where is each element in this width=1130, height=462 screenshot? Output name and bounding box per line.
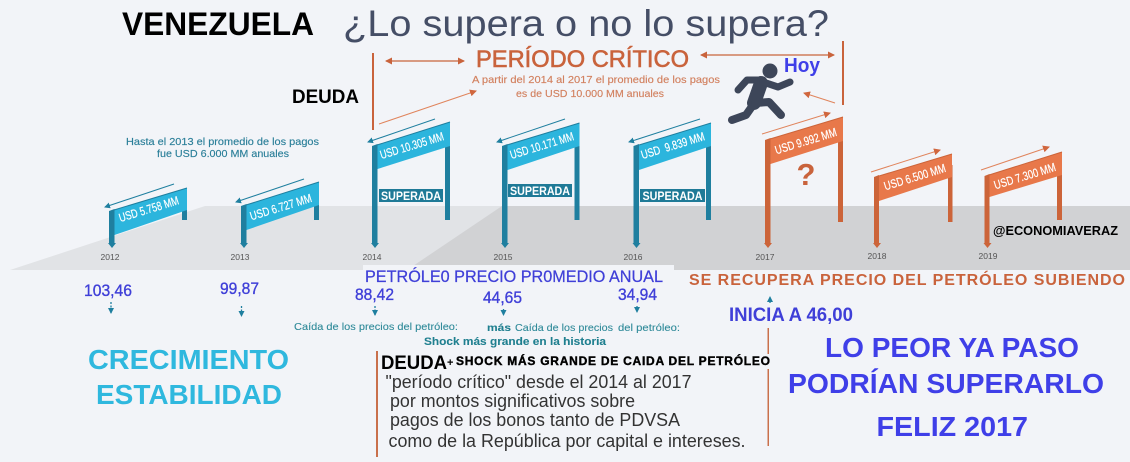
heading: oil price recovers: SE RECUPERA PRECIO DEL PETRÓLEO SUBIENDO <box>689 270 1125 289</box>
heading: conclusion: PODRÍAN SUPERARLO <box>788 368 1104 399</box>
credit handle: @ECONOMIAVERAZ <box>993 223 1118 238</box>
text: critical period description: pagos de los bonos tanto de PDVSA <box>390 410 680 430</box>
hurdle 2018 <box>871 150 952 248</box>
year axis labels: 2018 <box>868 251 887 261</box>
title: question: ¿Lo supera o no lo supera? <box>343 3 829 44</box>
text: fall of oil prices: más <box>487 322 511 334</box>
text: fall of oil prices <box>294 321 680 348</box>
year axis labels: 2015 <box>494 252 513 262</box>
hurdle 2016: USD 9.839 MM <box>639 129 706 162</box>
text: fall of oil prices: Shock más grande en la historia <box>424 336 607 348</box>
hurdle 2012: USD 5.758 MM <box>117 193 181 225</box>
year axis labels <box>101 251 998 262</box>
ground band <box>10 206 1130 275</box>
heading: growth and stability: CRECIMIENTO <box>88 344 289 375</box>
dashed price arrows <box>111 297 770 316</box>
heading: periodo critico: PERÍODO CRÍTICO <box>476 46 689 73</box>
hurdle 2017: USD 9.992 MM <box>773 125 838 157</box>
hurdle 2019: USD 7.300 MM <box>992 160 1057 192</box>
heading: oil average price: PETRÓLE0 PRECIO PR0MEDIO ANUAL <box>365 267 663 286</box>
heading: growth and stability <box>88 344 289 410</box>
text: fall of oil prices: Caída de los precios del petróleo: <box>294 321 458 333</box>
heading: debt plus shock: + <box>447 357 453 369</box>
year axis labels: 2019 <box>979 251 998 261</box>
year axis labels: 2016 <box>624 252 643 262</box>
label: deuda: DEUDA <box>292 87 359 108</box>
hurdle 2014 <box>368 119 450 248</box>
critical period brackets and arrows <box>373 41 843 130</box>
title: Venezuela: VENEZUELA <box>122 6 314 42</box>
year axis labels: 2012 <box>101 252 120 262</box>
oil prices per year: 44,65 <box>483 288 522 307</box>
year axis labels: 2017 <box>756 252 775 262</box>
text: critical period description: como de la República por capital e intereses. <box>388 431 746 451</box>
hurdle 2012 <box>105 184 187 248</box>
heading: debt plus shock: DEUDA <box>381 353 447 374</box>
hurdle 2013: USD 6.727 MM <box>248 191 313 223</box>
oil prices per year: 34,94 <box>618 285 657 304</box>
heading: growth and stability: ESTABILIDAD <box>96 379 282 410</box>
text: critical period average <box>472 74 720 100</box>
text: payments up to 2013: fue USD 6.000 MM anuales <box>157 148 289 160</box>
oil prices per year: 103,46 <box>84 281 132 300</box>
question mark: ? <box>797 157 815 192</box>
heading: debt plus shock <box>381 353 770 374</box>
heading: conclusion: LO PEOR YA PASO <box>825 332 1079 363</box>
hurdle 2015: USD 10.171 MM <box>508 129 575 162</box>
hurdle 2019 <box>981 147 1062 248</box>
badge: superada 2014: SUPERADA <box>381 189 441 203</box>
heading: conclusion <box>788 332 1104 442</box>
heading: debt plus shock: SHOCK MÁS GRANDE DE CAIDA DEL PETRÓLEO <box>456 353 770 368</box>
heading: conclusion: FELIZ 2017 <box>876 411 1028 442</box>
hurdle 2016 <box>629 119 711 248</box>
hurdle 2018: USD 6.500 MM <box>882 161 947 193</box>
oil prices per year: 99,87 <box>220 279 259 298</box>
label: hoy: Hoy <box>784 55 821 77</box>
hurdle 2014: USD 10.305 MM <box>378 129 445 162</box>
oil prices per year: 88,42 <box>355 285 394 304</box>
oil prices per year <box>84 279 657 307</box>
panel dividers <box>376 328 769 457</box>
icon: runner <box>732 64 790 120</box>
badge: superada 2016: SUPERADA <box>642 189 703 203</box>
text: payments up to 2013: Hasta el 2013 el promedio de los pagos <box>126 136 319 148</box>
hurdle 2013 <box>236 179 319 248</box>
label: starts at 46: INICIA A 46,00 <box>729 305 853 326</box>
text: critical period average: es de USD 10.000 MM anuales <box>516 88 664 100</box>
text: critical period description <box>386 372 746 451</box>
text: critical period description: por montos significativos sobre <box>390 391 635 411</box>
text: critical period average: A partir del 2014 al 2017 el promedio de los pagos <box>472 74 720 86</box>
text: payments up to 2013 <box>126 136 319 160</box>
text: fall of oil prices: Caída de los precios <box>515 322 613 334</box>
year axis labels: 2013 <box>231 252 250 262</box>
hurdle 2015 <box>497 119 580 248</box>
year axis labels: 2014 <box>363 252 382 262</box>
text: critical period description: "período crítico" desde el 2014 al 2017 <box>386 372 692 392</box>
text: fall of oil prices: del petróleo: <box>618 322 680 334</box>
hurdle 2017 <box>762 113 843 248</box>
badge: superada 2015: SUPERADA <box>510 184 570 198</box>
